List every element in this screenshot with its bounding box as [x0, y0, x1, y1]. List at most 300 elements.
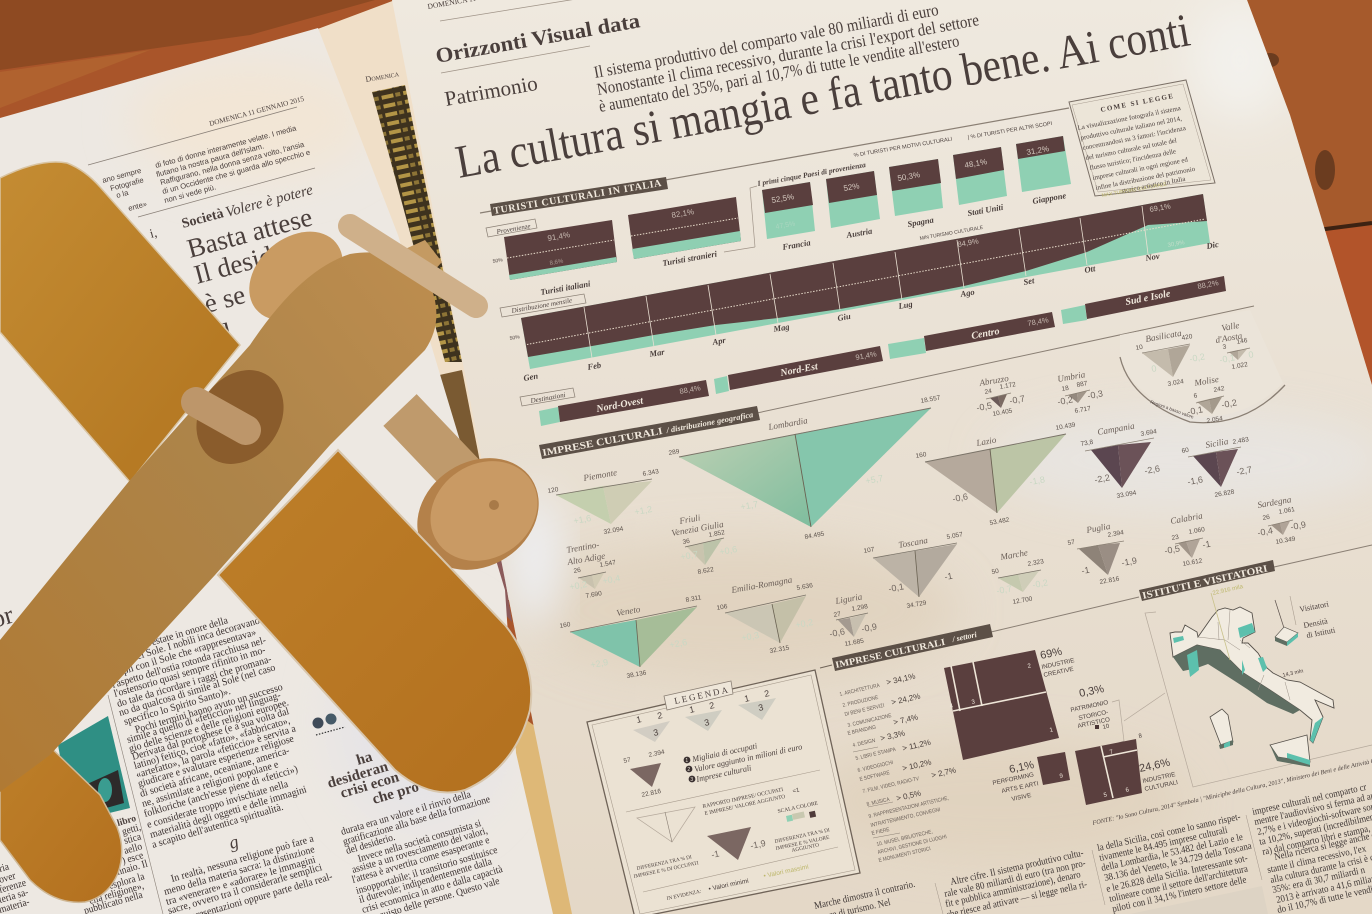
- treemap: industrie creative: 4: [949, 703, 954, 710]
- triangle: Toscana: 5.057: [946, 531, 964, 541]
- triangle: Sicilia: -1,6: [1187, 474, 1204, 487]
- triangle: Abruzzo: -0,5: [976, 400, 993, 413]
- monthly distribution area chart: 50%: [509, 334, 521, 342]
- bar: turisti stranieri: [628, 197, 741, 268]
- legend key triangles: 2: [708, 700, 715, 711]
- left page body text: materialità degli oggetti e delle immagini: [149, 784, 308, 841]
- map panel frame: [1145, 612, 1372, 787]
- article body text columns: della Lombardia, le 53.482 del Lazio e le: [1100, 832, 1244, 874]
- masthead: Patrimonio: [443, 71, 539, 111]
- triangle: Puglia: -1,9: [1121, 555, 1138, 568]
- triangle: Trentino-Alto Adige: +0,4: [602, 573, 621, 586]
- section label: imprese culturali settori: [820, 597, 1139, 671]
- triangle: Veneto: 38.136: [626, 670, 647, 680]
- left page header and headline: ano sempre: [101, 166, 142, 185]
- left page header and headline: non si vede più.: [163, 182, 217, 205]
- left page body text: specifico lo Spirito Santo)».: [123, 686, 232, 728]
- map legend cube: [1275, 596, 1337, 646]
- triangle: Liguria: 27: [833, 611, 842, 619]
- triangle: Lombardia: +1,7: [740, 499, 759, 512]
- triangle: Emilia-Romagna: Emilia-Romagna: [730, 574, 793, 595]
- triangle: Sardegna: 1.061: [1278, 506, 1296, 516]
- sector list: DI BENI E SERVIZI: [844, 703, 885, 718]
- triangle: Campania: Campania: [1097, 421, 1136, 437]
- legend ratio explanation: E IMPRESE/ VALORE AGGIUNTO: [704, 794, 786, 817]
- left page header and headline: DOMENICA 11 GENNAIO 2015: [208, 95, 305, 128]
- left page body text: giudicare e svalutare esperienze religiose: [137, 733, 296, 790]
- legend difference captions: AGGIUNTO: [791, 842, 820, 854]
- triangle: Veneto: Veneto: [616, 604, 641, 618]
- triangle: Trentino-Alto Adige: [566, 539, 621, 600]
- legend example triangle: 22.816: [641, 788, 662, 799]
- legend difference captions: IMPRESE E % VALORE: [775, 835, 830, 852]
- map of Italy: [1170, 584, 1334, 767]
- provenance bars: I primi cinque Paesi di provenienza: [756, 160, 867, 188]
- left page body text: libro: [116, 814, 138, 829]
- treemap: industrie culturali: 5: [1103, 792, 1108, 799]
- triangle: Basilicata: 10: [1135, 344, 1144, 352]
- triangle: Molise: 6: [1193, 392, 1198, 400]
- triangle: Friuli Venezia Giulia: 8.622: [697, 566, 715, 576]
- legend key triangles: 2: [763, 688, 770, 699]
- triangle: Lazio: 53.482: [989, 517, 1010, 527]
- section label: turisti culturali in italia: [480, 108, 1069, 217]
- article body text columns: fit e pubblica amministrazione), denaro: [944, 869, 1082, 910]
- month labels: [523, 239, 1220, 383]
- tag: distribuzione mensile: [500, 294, 586, 317]
- triangle: Molise: 2.054: [1206, 415, 1224, 425]
- legend highlight key: IN EVIDENZA:: [666, 889, 702, 902]
- triangle: Friuli Venezia Giulia: 36: [682, 538, 691, 546]
- triangle: Veneto: 8.311: [685, 594, 702, 604]
- left page header and headline: Raffigurano, nella donna senza volto, l'ansia: [159, 140, 306, 187]
- article body text columns: ta 10,2%, superati (incredibilmen: [1258, 811, 1372, 848]
- left page body text: ella religione»,: [88, 880, 145, 907]
- triangle: Puglia: 22.816: [1099, 576, 1120, 586]
- bar: Stati Uniti: Stati Uniti: [967, 202, 1005, 218]
- left page header and headline: di un Occidente che si guarda allo specchio e: [161, 148, 311, 196]
- left page body text: meno della materia sacra: la distinzione: [163, 844, 316, 898]
- provenance bars: % DI TURISTI PER MOTIVI CULTURALI: [853, 137, 953, 159]
- legend colour scale: [777, 800, 819, 822]
- sector list: 9. RAPPRESENTAZIONI ARTISTICHE,: [868, 795, 949, 820]
- triangle: Molise: -0,2: [1221, 397, 1238, 410]
- bar: Spagna: Spagna: [907, 214, 935, 229]
- triangle: Trentino-Alto Adige: 7.690: [585, 590, 603, 600]
- sector list: 8. MUSICA: [866, 796, 891, 808]
- patrimonio storico artistico: PATRIMONIO: [1070, 699, 1109, 714]
- left page body text: il durevole; indipendentemente dalla: [358, 856, 494, 906]
- article body text columns: [813, 782, 1372, 914]
- left page header and headline: 'l: [216, 317, 236, 349]
- plane: lower wing: [218, 450, 531, 792]
- triangle: Trentino-Alto Adige: Alto Adige: [566, 551, 606, 567]
- bar: Stati Uniti: [953, 147, 1007, 218]
- left page header and headline: o la: [115, 188, 130, 200]
- triangle: Emilia-Romagna: +0,3: [741, 630, 760, 643]
- triangle: Marche: 50: [991, 568, 1000, 576]
- how to read box: [1069, 80, 1215, 196]
- triangle: Molise: Molise: [1193, 374, 1219, 388]
- article body text columns: alla cultura durante la crisi è c: [1269, 853, 1372, 886]
- triangle: Veneto: +2,9: [590, 657, 609, 670]
- triangle: Friuli Venezia Giulia: Venezia Giulia: [671, 519, 725, 538]
- plane: rear cylinder: [232, 213, 360, 339]
- triangle: Basilicata: 3.024: [1167, 378, 1185, 388]
- triangle: Toscana: [863, 531, 964, 610]
- treemap: industrie culturali: [1075, 733, 1179, 805]
- triangle: Campania: 33.094: [1116, 490, 1137, 500]
- triangle: Basilicata: Basilicata: [1145, 328, 1183, 344]
- triangle: Lombardia: 289: [668, 448, 680, 457]
- triangle: Trentino-Alto Adige: 26: [573, 567, 582, 575]
- section label: istituti e visitatori: ISTITUTI E VISITATORI: [1141, 563, 1269, 602]
- sector list: 1. ARCHITETTURA: [839, 682, 881, 698]
- monthly distribution area chart: MIN TURISMO CULTURALE: [919, 225, 984, 242]
- triangle: Sardegna: -0,4: [1257, 525, 1274, 538]
- bar: Nord-Ovest: 88,4%: [679, 383, 702, 396]
- bar: Francia: [762, 182, 815, 252]
- sector list: 10. MUSEI, BIBLIOTECHE,: [876, 829, 933, 848]
- bar: Nord-Est: Nord-Est: [779, 361, 820, 379]
- treemap: performing arts: [992, 752, 1070, 803]
- triangle: Umbria: 18: [1061, 385, 1070, 393]
- triangle: Lombardia: 84.495: [804, 531, 825, 541]
- month labels: Mag: [772, 321, 791, 334]
- left page header and headline: Società: [180, 206, 225, 232]
- triangle: Marche: -0,2: [1032, 577, 1049, 590]
- bar: turisti italiani: 8,6%: [549, 259, 564, 267]
- legend title: [664, 681, 733, 710]
- article body text columns: piloti con il 34,1% l'intero settore delle: [1111, 875, 1247, 914]
- legend key triangles: 1: [635, 714, 642, 725]
- left page body text: e considerate troppo invischiate nella: [146, 779, 290, 831]
- left page body text: simile a quello di «feticcio» nel linguag-: [126, 690, 283, 746]
- triangle: Liguria: -0,6: [829, 626, 846, 639]
- triangle: Valle d'Aosta: d'Aosta: [1215, 330, 1243, 345]
- triangle: Valle d'Aosta: 3: [1222, 343, 1227, 351]
- plane: wheel: [396, 436, 560, 592]
- treemap: industrie culturali: 8: [1138, 733, 1143, 740]
- triangle: Abruzzo: 24: [984, 388, 993, 396]
- legend key triangles: 3: [652, 727, 659, 738]
- triangle: Piemonte: +1,2: [634, 504, 653, 517]
- treemap: industrie culturali: CULTURALI: [1144, 779, 1179, 793]
- triangle: Calabria: 10.612: [1182, 558, 1203, 568]
- triangle: Valle d'Aosta: -0,1: [1219, 352, 1236, 365]
- left page body text: durata era un valore e il rinvio della: [340, 789, 473, 838]
- left page body text: stica: [123, 831, 143, 847]
- sector list: > 10,2%: [901, 758, 932, 773]
- triangle: Emilia-Romagna: 106: [716, 603, 728, 612]
- left page body text: del desiderio.: [345, 832, 397, 857]
- triangle: Valle d'Aosta: 0: [1248, 349, 1254, 360]
- patrimonio storico artistico: ARTISTICO: [1077, 716, 1111, 730]
- left page body text: aello: [123, 841, 144, 857]
- plane: propeller hub: [403, 240, 442, 275]
- left page body text: «artefatto», la parola «feticcio» è servita a: [135, 723, 298, 781]
- bar: Giappone: 31,2%: [1026, 144, 1050, 157]
- left page body text: assiste a un rovesciamento dei valori,: [351, 825, 489, 876]
- triangle: Piemonte: [547, 467, 660, 536]
- triangle: Puglia: 57: [1067, 539, 1076, 547]
- bar: Nord-Ovest: Nord-Ovest: [595, 395, 645, 415]
- inset circle for small regions: Regioni a basso valore: [1150, 399, 1195, 420]
- small photo on back page: [417, 370, 512, 622]
- treemap: performing arts: 6,1%: [1008, 759, 1035, 776]
- patrimonio storico artistico: [1070, 683, 1165, 743]
- left page body text: l'ostensorio quasi sempre rifinito in mo-: [113, 644, 268, 700]
- map dark coast: [1173, 645, 1300, 714]
- treemap: industrie creative: 1: [1049, 727, 1054, 734]
- month labels: Feb: [586, 360, 602, 372]
- article body text columns: Altre cifre. Il sistema produttivo cultu-: [949, 847, 1085, 888]
- section label: istituti e visitatori: [1139, 545, 1372, 602]
- left page body text: crisi econ: [339, 769, 402, 802]
- plane: tail fin: [0, 742, 122, 902]
- back page of the left newspaper: Domenica: [365, 69, 400, 84]
- masthead: Orizzonti Visual data: [434, 8, 642, 68]
- triangle: Sicilia: 2.483: [1232, 436, 1250, 446]
- triangle: Abruzzo: [976, 373, 1026, 418]
- bar: Stati Uniti: 48,1%: [964, 157, 988, 170]
- how to read box: infine la distribuzione del patrimonio: [1095, 166, 1196, 192]
- sector list: 2. PRODUZIONE: [842, 695, 879, 709]
- treemap: industrie creative: INDUSTRIE: [1041, 657, 1075, 671]
- sector list: E MONUMENTI STORICI: [878, 846, 931, 864]
- triangle: Sicilia: 60: [1181, 447, 1190, 455]
- bar: turisti italiani: Turisti italiani: [540, 278, 592, 297]
- triangle: Sicilia: 26.828: [1214, 489, 1235, 499]
- left page body text: l'attesa è avvertita come esasperante e: [351, 834, 491, 886]
- left page body text: l'aspetto dell'ostia rotonda racchiusa nel-: [111, 635, 268, 691]
- triangle: Toscana: 34.729: [906, 600, 927, 610]
- triangle: Lazio: -0,6: [952, 491, 969, 504]
- plane: fuselage: [0, 252, 436, 792]
- triangle: Sicilia: -2,7: [1236, 464, 1253, 477]
- triangle: Liguria: [829, 591, 878, 648]
- article body text columns: 38.136 del Veneto, le 34.729 della Toscana: [1103, 841, 1253, 884]
- triangle: Toscana: Toscana: [898, 535, 929, 550]
- triangle: Piemonte: 6.343: [642, 468, 660, 478]
- bar: Sud e Isole: Sud e Isole: [1124, 288, 1172, 308]
- inset circle for small regions: [1120, 310, 1285, 423]
- article body text columns: 35%: era di 30,7 miliardi n: [1271, 865, 1366, 896]
- triangle: Sicilia: Sicilia: [1205, 436, 1229, 450]
- triangle: Puglia: -1: [1081, 565, 1090, 576]
- map annotations: [1211, 593, 1230, 660]
- bracket to top five countries: [724, 186, 757, 252]
- triangle: Umbria: -0,3: [1087, 388, 1104, 401]
- newspaper dark text strip: [372, 85, 462, 362]
- bar: Centro: [888, 312, 1055, 359]
- triangle: Puglia: 2.394: [1107, 529, 1125, 539]
- tag: destinazioni: Destinazioni: [529, 391, 566, 405]
- section label: imprese culturali distribuzione geografica: IMPRESE CULTURALI: [542, 426, 664, 459]
- triangle: Campania: 73,8: [1080, 439, 1094, 448]
- triangle: Valle d'Aosta: Valle: [1221, 320, 1240, 333]
- left page body text: desideran: [326, 759, 391, 792]
- triangle: Umbria: -0,2: [1057, 394, 1074, 407]
- left page header and headline: flutano la nostra paura dell'Islam.: [155, 141, 265, 179]
- left page body text: folkloriche (anch'esse piene di «feticci»): [143, 764, 299, 820]
- bar: Austria: [826, 171, 880, 240]
- article body text columns: la della Sicilia, così come lo sanno rispet-: [1096, 812, 1242, 854]
- triangle: Molise: [1187, 374, 1238, 425]
- legend ratio explanation: =1: [792, 788, 801, 795]
- treemap: industrie creative: 2: [1027, 663, 1032, 670]
- triangle: Umbria: 887: [1076, 380, 1088, 389]
- sector list: 6. VIDEOGIOCHI: [857, 760, 894, 774]
- treemap: performing arts: ARTS E ARTI: [1001, 780, 1039, 795]
- treemap: industrie culturali: 7: [1109, 749, 1114, 756]
- section label: turisti culturali in italia: TURISTI CULTURALI IN ITALIA: [493, 178, 663, 217]
- map of Italy: 14,3 mln: [1282, 668, 1304, 679]
- sector list: > 3,3%: [879, 729, 906, 743]
- sector list: ARCHIVI, GESTIONE DI LUOGHI: [877, 834, 947, 856]
- legend key triangles: 2: [656, 710, 663, 721]
- back page of the left newspaper: [315, 0, 520, 622]
- plane: upper wing: [0, 162, 240, 482]
- legend ratio explanation: RAPPORTO IMPRESE/ OCCUPATI: [702, 787, 784, 810]
- how to read box: La visualizzazione fotografa il sistema: [1077, 105, 1181, 132]
- sector list: > 0,5%: [895, 789, 922, 803]
- bar: Austria: Austria: [845, 225, 874, 240]
- yellow wooden strip under the newspaper: [500, 700, 575, 914]
- month labels: Gen: [523, 371, 539, 383]
- monthly distribution area chart: 69,1%: [1149, 201, 1172, 214]
- plane: propeller: [350, 226, 476, 306]
- treemap: industrie culturali: INDUSTRIE: [1142, 771, 1176, 785]
- triangle: Sardegna: 26: [1262, 514, 1271, 522]
- triangle: Basilicata: -0,2: [1189, 351, 1206, 364]
- legend colour scale: SCALA COLORE: [777, 800, 819, 815]
- triangle: Molise: 242: [1213, 385, 1225, 394]
- top five countries bars: [762, 136, 1071, 252]
- sector list: 3. COMUNICAZIONE: [847, 713, 893, 729]
- month labels: Set: [1023, 275, 1036, 287]
- triangle: Puglia: Puglia: [1085, 521, 1111, 535]
- legend key triangles: [633, 688, 776, 742]
- triangle: Piemonte: +1,6: [573, 513, 592, 526]
- legend numbered key: 3: [690, 777, 693, 783]
- triangle: Emilia-Romagna: +0,2: [795, 617, 814, 630]
- bar: Sud e Isole: [1061, 276, 1226, 324]
- legend panel: [587, 670, 860, 914]
- triangle: Umbria: 6.717: [1074, 405, 1092, 415]
- left page header and headline: Basta attese: [184, 202, 315, 264]
- legend difference captions: IMPRESE E % DI OCCUPATI: [633, 860, 700, 880]
- left page body text: do tale da ricordare i raggi che promana-: [116, 654, 273, 710]
- triangle: Lazio: [915, 422, 1076, 527]
- triangle: Lombardia: +5,7: [865, 473, 884, 486]
- treemap: industrie creative: 3: [971, 699, 976, 706]
- triangle: Calabria: -1: [1202, 539, 1211, 550]
- month labels: Apr: [711, 335, 727, 347]
- left page body text: getti,: [121, 822, 142, 838]
- legend numbered key: Migliaia di occupati: [690, 740, 759, 764]
- legend ratio explanation: [702, 787, 801, 817]
- triangle: Puglia: [1067, 521, 1138, 586]
- month labels: Dic: [1205, 239, 1220, 251]
- legend difference triangle: -1: [710, 849, 720, 860]
- destination bars: [520, 276, 1226, 426]
- left page header and headline: Fotografie: [109, 175, 145, 193]
- map of Italy: 22.916 mila: [1212, 584, 1244, 597]
- article body text columns: imprese culturali nel comparto cr: [1251, 782, 1368, 818]
- subheading text block: Nonostante il clima recessivo, durante la crisi l'export del settore: [595, 10, 980, 99]
- triangle: Basilicata: 0: [1151, 363, 1157, 374]
- how to read box: COME SI LEGGE: [1100, 92, 1175, 114]
- bar: Nord-Est: [714, 346, 883, 394]
- provenance bars: | % DI TURISTI PER ALTRI SCOPI: [967, 121, 1053, 141]
- triangle: Basilicata: 420: [1181, 333, 1193, 342]
- legend difference triangle: [707, 827, 767, 860]
- monthly distribution area chart: 84,9%: [957, 236, 980, 249]
- left page body text: ha: [355, 749, 375, 769]
- triangle: Marche: Marche: [999, 547, 1029, 562]
- left page body text: esplora la: [108, 871, 146, 892]
- triangle: Liguria: 11.685: [844, 638, 865, 648]
- sector list: > 34,1%: [885, 672, 916, 687]
- triangle: Sardegna: -0,9: [1290, 519, 1307, 532]
- triangle: Sardegna: Sardegna: [1257, 494, 1292, 510]
- triangle: Toscana: -0,1: [888, 581, 905, 594]
- left page header and headline: di foto di donne interamente velate. I media: [154, 123, 298, 170]
- sector list: > 2,7%: [930, 766, 957, 780]
- triangle: Calabria: [1164, 510, 1211, 568]
- tag: provenienze: [486, 219, 537, 237]
- bar: Spagna: 50,3%: [897, 170, 921, 183]
- legend difference captions: DIFFERENZA TRA % DI: [636, 854, 693, 872]
- triangle: Liguria: -0,9: [861, 621, 878, 634]
- sector list: 5. LIBRI E STAMPA: [855, 746, 897, 762]
- triangle: Lazio: 10.439: [1055, 422, 1076, 432]
- bar: Nord-Ovest: [539, 380, 709, 426]
- bar: Austria: 52%: [843, 181, 860, 193]
- plane: landing gear axle: [400, 410, 462, 475]
- triangle: Calabria: -0,5: [1164, 543, 1181, 556]
- triangle: Emilia-Romagna: [716, 574, 814, 655]
- monthly distribution area chart: [500, 181, 1220, 383]
- legend key triangles: 1: [743, 693, 750, 704]
- treemap: industrie creative: 69%: [1039, 646, 1063, 662]
- bar: Giappone: Giappone: [1032, 190, 1067, 206]
- treemap: industrie creative: CREATIVE: [1043, 666, 1074, 679]
- provenance bars: [486, 121, 1053, 297]
- map north and boot: [1170, 607, 1334, 743]
- triangle: Veneto: +2,6: [669, 637, 688, 650]
- triangle: Calabria: 23: [1171, 534, 1180, 542]
- map teal regions: [1173, 636, 1184, 643]
- left page header and headline: è se: [201, 279, 248, 319]
- bar: turisti italiani: 50%: [492, 257, 504, 265]
- treemap: performing arts: VISIVE: [1011, 792, 1032, 803]
- month labels: Nov: [1144, 251, 1161, 263]
- triangle: Piemonte: Piemonte: [582, 467, 618, 483]
- section label: imprese culturali settori: / settori: [951, 630, 978, 644]
- article body text columns: e le 26.828 della Sicilia. Interessante sot-: [1105, 853, 1249, 895]
- triangle: Friuli Venezia Giulia: +0,6: [719, 544, 738, 557]
- month labels: Giu: [837, 311, 852, 323]
- left page body text: Derivata dal portoghese (e a sua volta dal: [131, 706, 291, 763]
- sector list: E SOFTWARE: [859, 770, 891, 783]
- patrimonio storico artistico: STORICO-: [1078, 709, 1109, 722]
- left page body text: che pro: [371, 779, 421, 808]
- legend numbered key: Imprese culturali: [694, 762, 753, 784]
- right newspaper page: [392, 0, 1372, 914]
- tag: distribuzione mensile: Distribuzione mensile: [510, 296, 573, 315]
